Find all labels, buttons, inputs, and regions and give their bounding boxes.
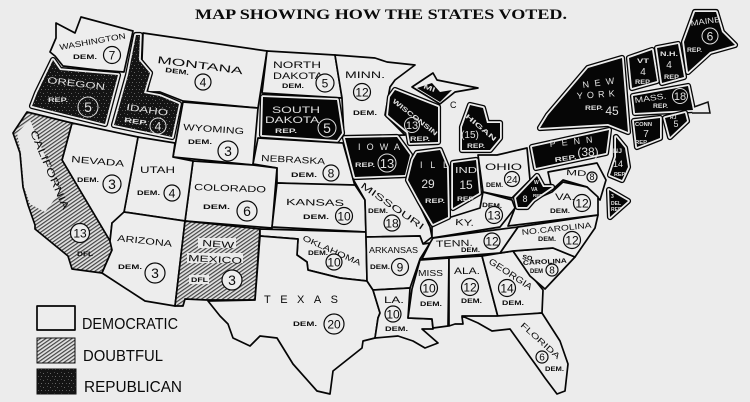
state: Delaware: 3	[611, 194, 614, 200]
state: Tennessee: 12	[485, 234, 499, 248]
state: Idaho: 4	[155, 120, 162, 134]
state: West Virginia: REP	[533, 193, 542, 198]
state: New York: NEW	[582, 76, 615, 90]
state: Massachusetts: MASS.	[634, 92, 667, 105]
state: Mississippi: MISS	[418, 269, 443, 278]
state: Louisiana: 10	[386, 308, 400, 322]
state: California	[13, 112, 112, 273]
state: South Dakota	[262, 97, 342, 140]
state: Illinois: ILL	[420, 160, 448, 170]
state: Nebraska	[253, 138, 355, 186]
state: New Hampshire: REP.	[664, 74, 680, 81]
legend	[37, 306, 182, 396]
state: South Dakota: REP.	[275, 128, 297, 135]
state: Pennsylvania: PENN	[549, 135, 593, 149]
state: North Dakota: DAKOTA	[273, 71, 323, 81]
state: Montana	[142, 33, 267, 108]
state: Iowa: 13	[380, 156, 394, 171]
state: Kansas: DEM.	[303, 214, 329, 221]
state: West Virginia	[516, 176, 552, 207]
state: Tennessee	[422, 227, 518, 259]
state: Louisiana: LA.	[384, 295, 404, 305]
state: Michigan upper peninsula	[412, 73, 478, 104]
state: Nevada: DEM.	[77, 177, 99, 184]
state: Maine: 6	[707, 30, 714, 44]
state: Pennsylvania	[532, 130, 609, 168]
state: Vermont	[629, 50, 657, 88]
state: Arizona: DEM.	[118, 264, 142, 271]
state: Missouri: MISSOURI	[359, 180, 426, 232]
state: New York: REP.	[585, 105, 603, 112]
legend: democratic: DEMOCRATIC	[82, 316, 178, 333]
state: Wisconsin: 13	[406, 120, 418, 132]
state: Oklahoma: 10	[327, 256, 341, 270]
state: Idaho: IDAHO	[126, 102, 169, 118]
state: Ohio: 24	[506, 175, 518, 186]
state: Pennsylvania: (38)	[577, 145, 599, 159]
state: Wyoming: WYOMING	[183, 122, 244, 136]
state: California: 13	[73, 226, 87, 240]
state: Vermont: REP.	[635, 79, 651, 86]
state: Iowa: IOWA	[358, 142, 400, 152]
state: Illinois	[408, 150, 448, 224]
state: Florida: FLORIDA	[519, 321, 563, 362]
state: Tennessee: TENN.	[436, 238, 473, 249]
state: Louisiana	[373, 288, 438, 348]
state: Michigan lower peninsula: HIGAN	[464, 113, 498, 143]
state: Virginia	[508, 182, 598, 226]
state: Missouri	[353, 177, 432, 244]
state: Iowa: REP.	[355, 162, 375, 169]
state: Oregon: REP.	[48, 97, 68, 104]
state: South Carolina: DEM	[530, 268, 543, 275]
state: Massachusetts: REP.	[653, 103, 668, 110]
state: New Mexico	[175, 221, 260, 306]
state: Florida: DEM.	[545, 366, 564, 373]
state: Kansas: KANSAS	[286, 197, 344, 208]
state: Minnesota: DEM.	[353, 110, 377, 117]
state: Arizona: 3	[151, 265, 159, 281]
state: Maine	[684, 12, 735, 72]
state: Maryland: MD.	[566, 168, 590, 178]
state: Nevada: 3	[108, 176, 116, 192]
state: Kentucky	[432, 192, 515, 238]
state: New York: 45	[605, 104, 619, 118]
state: Oregon	[32, 60, 118, 124]
state: Maryland: 8	[589, 172, 595, 182]
state: North Dakota: 5	[322, 76, 329, 90]
state: New Mexico: DFL	[191, 277, 208, 284]
state: Nebraska: NEBRASKA	[261, 153, 325, 166]
state: Connecticut: REP.	[635, 140, 649, 146]
state: West Virginia: W	[534, 180, 539, 186]
state: Oklahoma: OKLAHOMA	[301, 234, 363, 268]
state: Michigan lower peninsula	[461, 105, 500, 150]
state: Arizona: ARIZONA	[117, 233, 173, 249]
state: Ohio: DEM.	[486, 182, 503, 189]
state: Oregon: 5	[84, 99, 92, 115]
state: California: DFL	[77, 251, 93, 258]
state: Washington: 7	[109, 48, 116, 62]
state: Georgia	[482, 251, 543, 317]
state: New Mexico: NEW	[202, 238, 235, 250]
state: Utah: 4	[169, 186, 176, 200]
state: Ohio	[478, 148, 530, 198]
state: Michigan lower peninsula: (15)	[461, 130, 479, 141]
state: Florida: 6	[539, 352, 545, 364]
state: Mississippi: 10	[422, 282, 436, 296]
legend: republican: REPUBLICAN	[84, 379, 182, 396]
state: Wyoming: DEM.	[188, 139, 212, 146]
state: Wisconsin	[388, 90, 439, 143]
state: Indiana: REP.	[457, 196, 475, 203]
state: Virginia: VA.	[555, 192, 575, 202]
title: MAP SHOWING HOW THE STATES VOTED.	[195, 7, 567, 23]
state: Michigan upper peninsula: MI	[422, 83, 436, 94]
state: Wyoming	[173, 102, 258, 165]
state: Montana: MONTANA	[157, 55, 244, 77]
state: Maryland	[548, 163, 606, 200]
state: Minnesota: MINN.	[345, 70, 385, 80]
state: Colorado: DEM.	[203, 204, 230, 211]
state: Vermont: 4	[640, 67, 646, 78]
state: Arkansas: 9	[397, 260, 404, 274]
legend: doubtful: DOUBTFUL	[83, 348, 163, 365]
state: Illinois: 29	[421, 177, 435, 191]
state: Connecticut: 7	[643, 129, 649, 140]
state: Missouri: DEM.	[368, 208, 388, 215]
state: Indiana	[453, 160, 479, 208]
state: New Mexico: MEXICO	[188, 253, 242, 266]
state: North Carolina: 12	[565, 234, 579, 248]
state: North Dakota: DEM.	[282, 83, 304, 90]
state: North Carolina	[500, 215, 598, 257]
state: Idaho	[114, 35, 179, 137]
state: Maine: MAINE	[690, 15, 721, 28]
state: Arkansas	[366, 236, 430, 290]
legend: doubtful	[37, 338, 163, 365]
state: Georgia: DEM.	[502, 300, 524, 307]
lake: Michigan letter: C	[450, 100, 457, 110]
state: Virginia: DEM.	[550, 208, 570, 215]
legend: republican	[37, 369, 182, 396]
state: Rhode Island	[665, 113, 687, 137]
state: Texas: DEM.	[293, 321, 317, 328]
state: Kentucky: 13	[487, 208, 501, 222]
state: Tennessee: DEM.	[461, 247, 480, 254]
state: New Hampshire: N.H.	[660, 51, 678, 58]
state: New Jersey: REP.	[614, 172, 627, 178]
state: Minnesota	[335, 55, 415, 137]
state: Iowa	[345, 137, 410, 177]
state: Kansas	[272, 183, 366, 232]
legend: democratic	[37, 306, 178, 333]
state: South Carolina	[513, 248, 575, 289]
state: Indiana: 15	[459, 178, 473, 192]
state: Rhode Island: R.I	[670, 115, 677, 121]
state: Michigan lower peninsula: REP.	[467, 143, 485, 150]
state: New York: YORK	[576, 88, 615, 101]
state: Delaware: DEL	[611, 201, 621, 207]
state: Idaho: REP.	[124, 117, 149, 127]
state: Kentucky: DEM.	[482, 202, 502, 210]
state: Florida	[462, 313, 568, 394]
state: Arizona	[102, 212, 185, 306]
state: Connecticut	[634, 118, 660, 147]
state: South Dakota: DAKOTA	[265, 115, 319, 125]
state: Georgia: GEORGIA	[487, 256, 534, 292]
state: South Carolina: 8	[549, 266, 555, 276]
state: North Carolina: NO.CAROLINA	[521, 221, 593, 237]
state: Delaware	[609, 190, 628, 217]
state: Wisconsin: REP.	[410, 136, 430, 143]
state: New Jersey: NJ	[613, 148, 622, 155]
state: Mississippi	[408, 258, 449, 328]
state: Arkansas: ARKANSAS	[369, 246, 418, 255]
state: Alabama	[449, 256, 498, 326]
state: Illinois: REP.	[425, 198, 445, 205]
state: Virginia: 12	[575, 196, 589, 210]
state: New Jersey: 14	[613, 159, 623, 169]
state: West Virginia: VA	[531, 187, 538, 193]
state: Colorado: COLORADO	[194, 182, 266, 195]
state: Texas: TEXAS	[264, 294, 338, 306]
state: Oklahoma: DEM.	[308, 250, 328, 257]
state: Colorado	[185, 161, 277, 228]
state: Montana: DEM.	[165, 67, 190, 77]
state: Connecticut: CONN	[635, 122, 652, 128]
state: Utah: DEM.	[137, 190, 160, 197]
state: South Dakota: 5	[323, 120, 331, 136]
state: Pennsylvania: REP.	[554, 154, 577, 164]
state: Texas	[208, 236, 380, 394]
state: Mississippi: DEM.	[420, 301, 442, 308]
state: West Virginia: 8	[522, 194, 528, 204]
state: Rhode Island: 5	[673, 119, 679, 129]
state: Washington: WASHINGTON	[59, 31, 127, 52]
state: Missouri: 18	[385, 216, 399, 230]
state: Arkansas: DEM.	[370, 264, 390, 271]
state: Nevada: NEVADA	[71, 154, 124, 169]
state: Oklahoma	[260, 229, 367, 281]
state: Louisiana: DEM.	[385, 326, 408, 333]
state: North Carolina: DEM.	[538, 236, 556, 243]
state: Washington	[50, 17, 133, 72]
state: South Carolina: SO.	[522, 254, 535, 263]
state: California: CALIFORNIA	[27, 129, 71, 212]
state: Vermont: VT	[637, 58, 649, 65]
state: Texas: 20	[327, 318, 341, 332]
state: Washington: DEM.	[73, 54, 97, 61]
state: South Carolina: CAROLINA	[523, 258, 567, 267]
state: Utah: UTAH	[140, 165, 175, 175]
state: Massachusetts	[633, 86, 710, 113]
state: New Mexico: 3	[228, 272, 236, 288]
state: Ohio: OHIO	[485, 162, 522, 172]
state: Kentucky: KY.	[455, 217, 474, 228]
state: North Dakota	[262, 51, 342, 98]
state: Montana: 4	[200, 76, 207, 90]
state: New Jersey	[610, 137, 628, 180]
state: Alabama: ALA.	[454, 266, 480, 276]
state: Minnesota: 12	[355, 86, 369, 100]
state: Maine: REP.	[687, 47, 702, 54]
state: Delaware: REP	[611, 207, 622, 213]
state: Wyoming: 3	[224, 143, 232, 159]
state: Colorado: 6	[243, 203, 251, 219]
state: South Dakota: SOUTH	[272, 105, 320, 115]
state: New Hampshire	[657, 44, 684, 83]
state: Kansas: 10	[337, 210, 351, 224]
state: Utah	[124, 137, 193, 221]
state: New Hampshire: 4	[666, 60, 672, 71]
state: Indiana: IND	[455, 166, 477, 175]
state: Massachusetts: 18	[674, 91, 686, 103]
state: New York	[540, 58, 628, 132]
state: Nevada	[62, 123, 138, 241]
state: Alabama: 12	[463, 280, 477, 294]
state: Oregon: OREGON	[47, 75, 106, 92]
state: Nebraska: 8	[328, 166, 335, 180]
state: Georgia: 14	[500, 282, 514, 296]
state: Nebraska: DEM.	[291, 172, 317, 179]
state: North Dakota: NORTH	[273, 60, 321, 70]
state: Alabama: DEM.	[461, 298, 482, 305]
state: Wisconsin: WISCONSIN	[391, 98, 439, 138]
